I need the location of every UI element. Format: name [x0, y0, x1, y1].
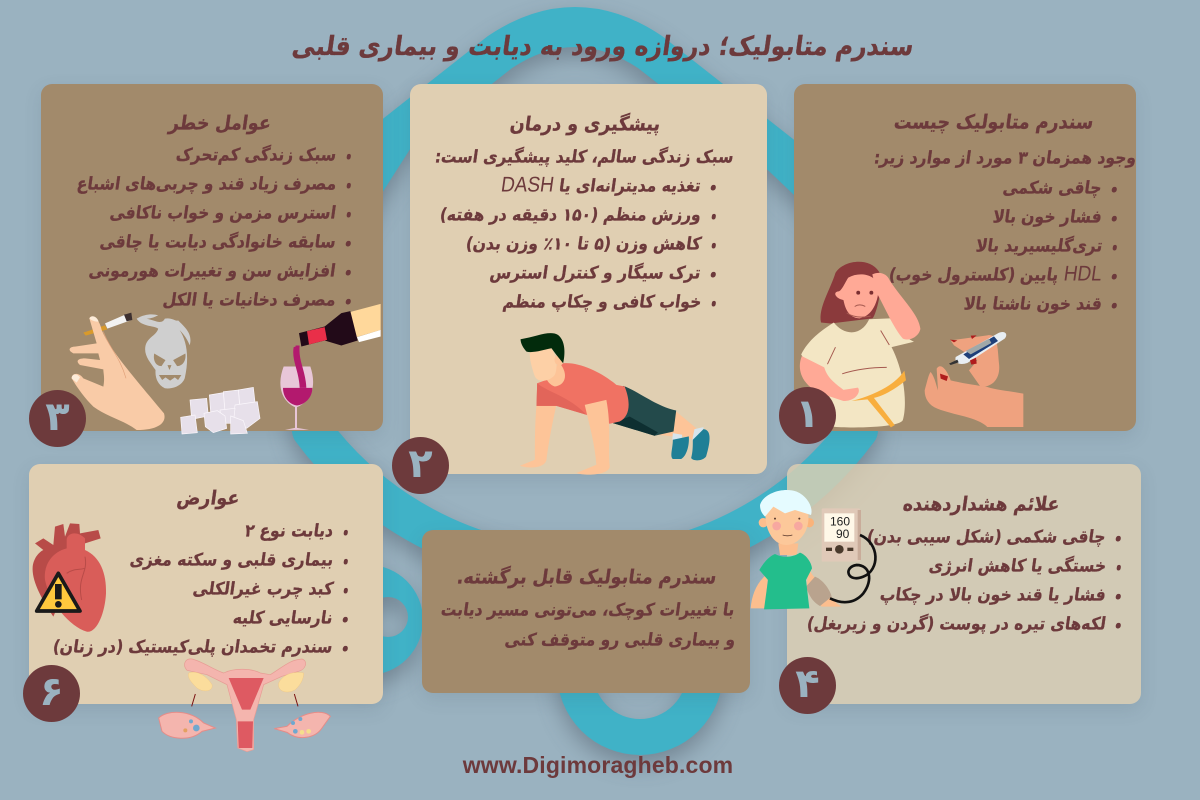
list: criteria: HDL پایین (کلسترول خوب)	[888, 263, 1104, 286]
list: warning signs: چاقی شکمی (شکل سیبی بدن)	[866, 527, 1107, 547]
badge: 1: ۱	[795, 391, 820, 437]
badge: 4	[779, 657, 836, 714]
icon: heart with warning sign	[32, 523, 106, 632]
title: سندرم متابولیک؛ دروازه ورود به دیابت و بیماری قلبی	[290, 30, 916, 62]
heading: risk factors: عوامل خطر	[167, 113, 273, 135]
badge: 6: ۶	[39, 669, 64, 715]
icon: elderly person with blood pressure monitor: 160	[830, 514, 850, 528]
list: risk factors	[75, 144, 351, 310]
icon: elderly person with blood pressure monitor	[750, 490, 877, 610]
panel: prevention and treatment (2)	[410, 84, 767, 474]
list: criteria: چاقی شکمی	[1002, 178, 1103, 198]
intro line: سبک زندگی سالم، کلید پیشگیری است:	[434, 147, 735, 167]
list: prevention	[438, 174, 716, 312]
heading: complications: عوارض	[176, 488, 242, 510]
panel: risk factors (3)	[41, 84, 383, 431]
heading: reversible: سندرم متابولیک قابل برگشته.	[455, 567, 718, 589]
badge: 4: ۴	[795, 661, 820, 707]
text: small changes line 2: و بیماری قلبی رو متوقف کنی	[503, 630, 736, 650]
badge: 3	[29, 390, 86, 447]
heading: what is it: سندرم متابولیک چیست	[892, 112, 1095, 134]
icon: elderly person with blood pressure monitor: 90	[836, 527, 850, 541]
list: complications	[52, 521, 348, 657]
badge: 1	[779, 387, 836, 444]
panel: what is metabolic syndrome (1)	[794, 84, 1136, 431]
text: small changes line 1: با تغییرات کوچک، می‌تونی مسیر دیابت	[440, 600, 736, 620]
icon: uterus and ovaries	[158, 658, 331, 752]
list: warning signs: لکه‌های تیره در پوست (گردن و زیربغل)	[806, 614, 1107, 634]
icon: wine bottle and glass	[280, 304, 381, 430]
list: complications: نارسایی کلیه	[232, 608, 334, 628]
list: prevention: کاهش وزن (۵ تا ۱۰٪ وزن بدن)	[464, 234, 702, 254]
icon: smoke skull	[136, 314, 190, 388]
badge: 2	[392, 437, 449, 494]
list: complications: دیابت نوع ۲	[243, 521, 334, 541]
badge: 3: ۳	[45, 394, 70, 440]
panel: complications (6)	[29, 464, 383, 704]
list: risk factors: مصرف زیاد قند و چربی‌های اشباع	[75, 174, 337, 194]
heading: warning signs: علائم هشداردهنده	[901, 494, 1061, 516]
list: criteria: قند خون ناشتا بالا	[963, 294, 1103, 314]
icon: man doing push-ups	[520, 333, 710, 475]
list: risk factors: استرس مزمن و خواب ناکافی	[109, 203, 337, 223]
list: prevention: ورزش منظم (۱۵۰ دقیقه در هفته)	[438, 205, 702, 225]
icon: hands with glucose meter	[924, 332, 1024, 427]
panel: warning signs (4)	[787, 464, 1141, 704]
list: criteria	[888, 178, 1117, 314]
list: warning signs: فشار یا قند خون بالا در چکاپ	[879, 585, 1107, 605]
icon: hand with cigarette	[70, 312, 164, 430]
heading: prevention: پیشگیری و درمان	[508, 114, 662, 136]
list: complications: کبد چرب غیرالکلی	[191, 579, 334, 599]
icon: sugar cubes	[180, 387, 260, 434]
website url: www.Digimoragheb.com	[463, 752, 733, 778]
list: complications: بیماری قلبی و سکته مغزی	[128, 550, 334, 570]
list: warning signs	[806, 527, 1121, 634]
list: risk factors: سابقه خانوادگی دیابت یا چاقی	[99, 232, 337, 252]
list: criteria: فشار خون بالا	[992, 207, 1103, 227]
panel: reversible message (5)	[422, 530, 750, 693]
icon: overweight woman with tape	[800, 262, 920, 428]
list: criteria: تری‌گلیسیرید بالا	[974, 236, 1103, 256]
list: risk factors: افزایش سن و تغییرات هورمونی	[88, 261, 337, 281]
list: complications: سندرم تخمدان پلی‌کیستیک (در زنان)	[52, 637, 334, 657]
list: prevention: خواب کافی و چکاپ منظم	[501, 292, 702, 312]
badge: 6	[23, 665, 80, 722]
list: risk factors: مصرف دخانیات یا الکل	[162, 290, 337, 310]
list: risk factors: سبک زندگی کم‌تحرک	[174, 145, 337, 165]
intro line: وجود همزمان ۳ مورد از موارد زیر:	[872, 148, 1137, 168]
list: warning signs: خستگی یا کاهش انرژی	[927, 556, 1107, 576]
list: prevention: تغذیه مدیترانه‌ای یا DASH	[500, 174, 702, 197]
badge: 2: ۲	[408, 441, 433, 487]
list: prevention: ترک سیگار و کنترل استرس	[489, 263, 702, 283]
